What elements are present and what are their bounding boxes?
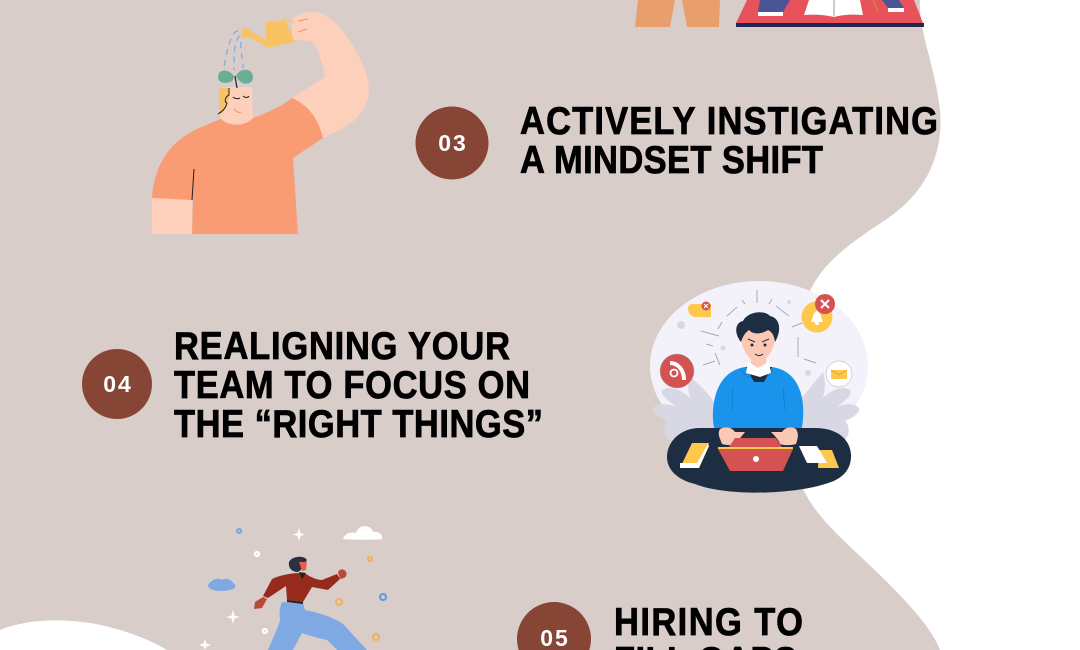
raised arm — [292, 12, 369, 138]
trousers — [635, 0, 720, 27]
belt — [287, 600, 303, 604]
step 03 badge — [416, 106, 488, 180]
red laptop — [718, 438, 793, 471]
step 03 heading: ACTIVELY INSTIGATING — [520, 99, 938, 142]
step 03 heading — [520, 99, 938, 181]
grey dots — [677, 300, 811, 376]
message with error icon — [688, 302, 711, 317]
step 05 badge — [517, 602, 591, 650]
white background blob bottom-left — [0, 620, 167, 650]
illustration: stressed man at laptop with notifications — [650, 281, 868, 493]
head — [218, 87, 253, 125]
pale background ellipse — [650, 281, 868, 451]
white sparkles — [199, 528, 305, 650]
sprout — [218, 70, 253, 88]
confetti rings — [237, 529, 386, 640]
sweater — [713, 367, 803, 445]
watering can — [241, 19, 308, 48]
step 03 heading: A MINDSET SHIFT — [520, 138, 823, 181]
hair and face — [289, 557, 307, 579]
illustration: running woman — [199, 526, 386, 650]
step 04 heading: THE “RIGHT THINGS” — [174, 402, 543, 445]
forearm — [152, 198, 192, 234]
water drops — [224, 31, 243, 70]
bell notification with close badge — [802, 294, 835, 332]
orange shirt — [152, 98, 323, 234]
papers — [799, 446, 839, 468]
illustration: person and books cropped at top — [635, 0, 924, 27]
phone notification — [660, 354, 694, 388]
step 04 heading: REALIGNING YOUR — [174, 324, 510, 367]
blue cloud — [208, 579, 235, 591]
red shirt — [263, 573, 340, 602]
hands — [719, 427, 798, 445]
step 04 badge: 04 — [103, 371, 133, 397]
grey leaves — [653, 372, 859, 440]
dark desk — [667, 428, 851, 493]
man — [713, 312, 803, 445]
step 03 badge: 03 — [438, 130, 468, 156]
hands — [254, 569, 347, 609]
step 05 heading: HIRING TO — [614, 600, 803, 643]
white background wave right — [800, 0, 1080, 650]
blue jeans — [268, 602, 367, 650]
mail notification — [826, 361, 852, 387]
step 04 heading — [174, 324, 543, 445]
illustration: person watering plant growing from head — [152, 12, 369, 234]
red desk with books — [736, 0, 924, 27]
yellow notebook — [680, 443, 709, 468]
step 04 badge — [82, 349, 152, 419]
radiating stress lines — [701, 290, 816, 365]
white cloud — [343, 526, 382, 540]
step 04 heading: TEAM TO FOCUS ON — [174, 363, 530, 406]
